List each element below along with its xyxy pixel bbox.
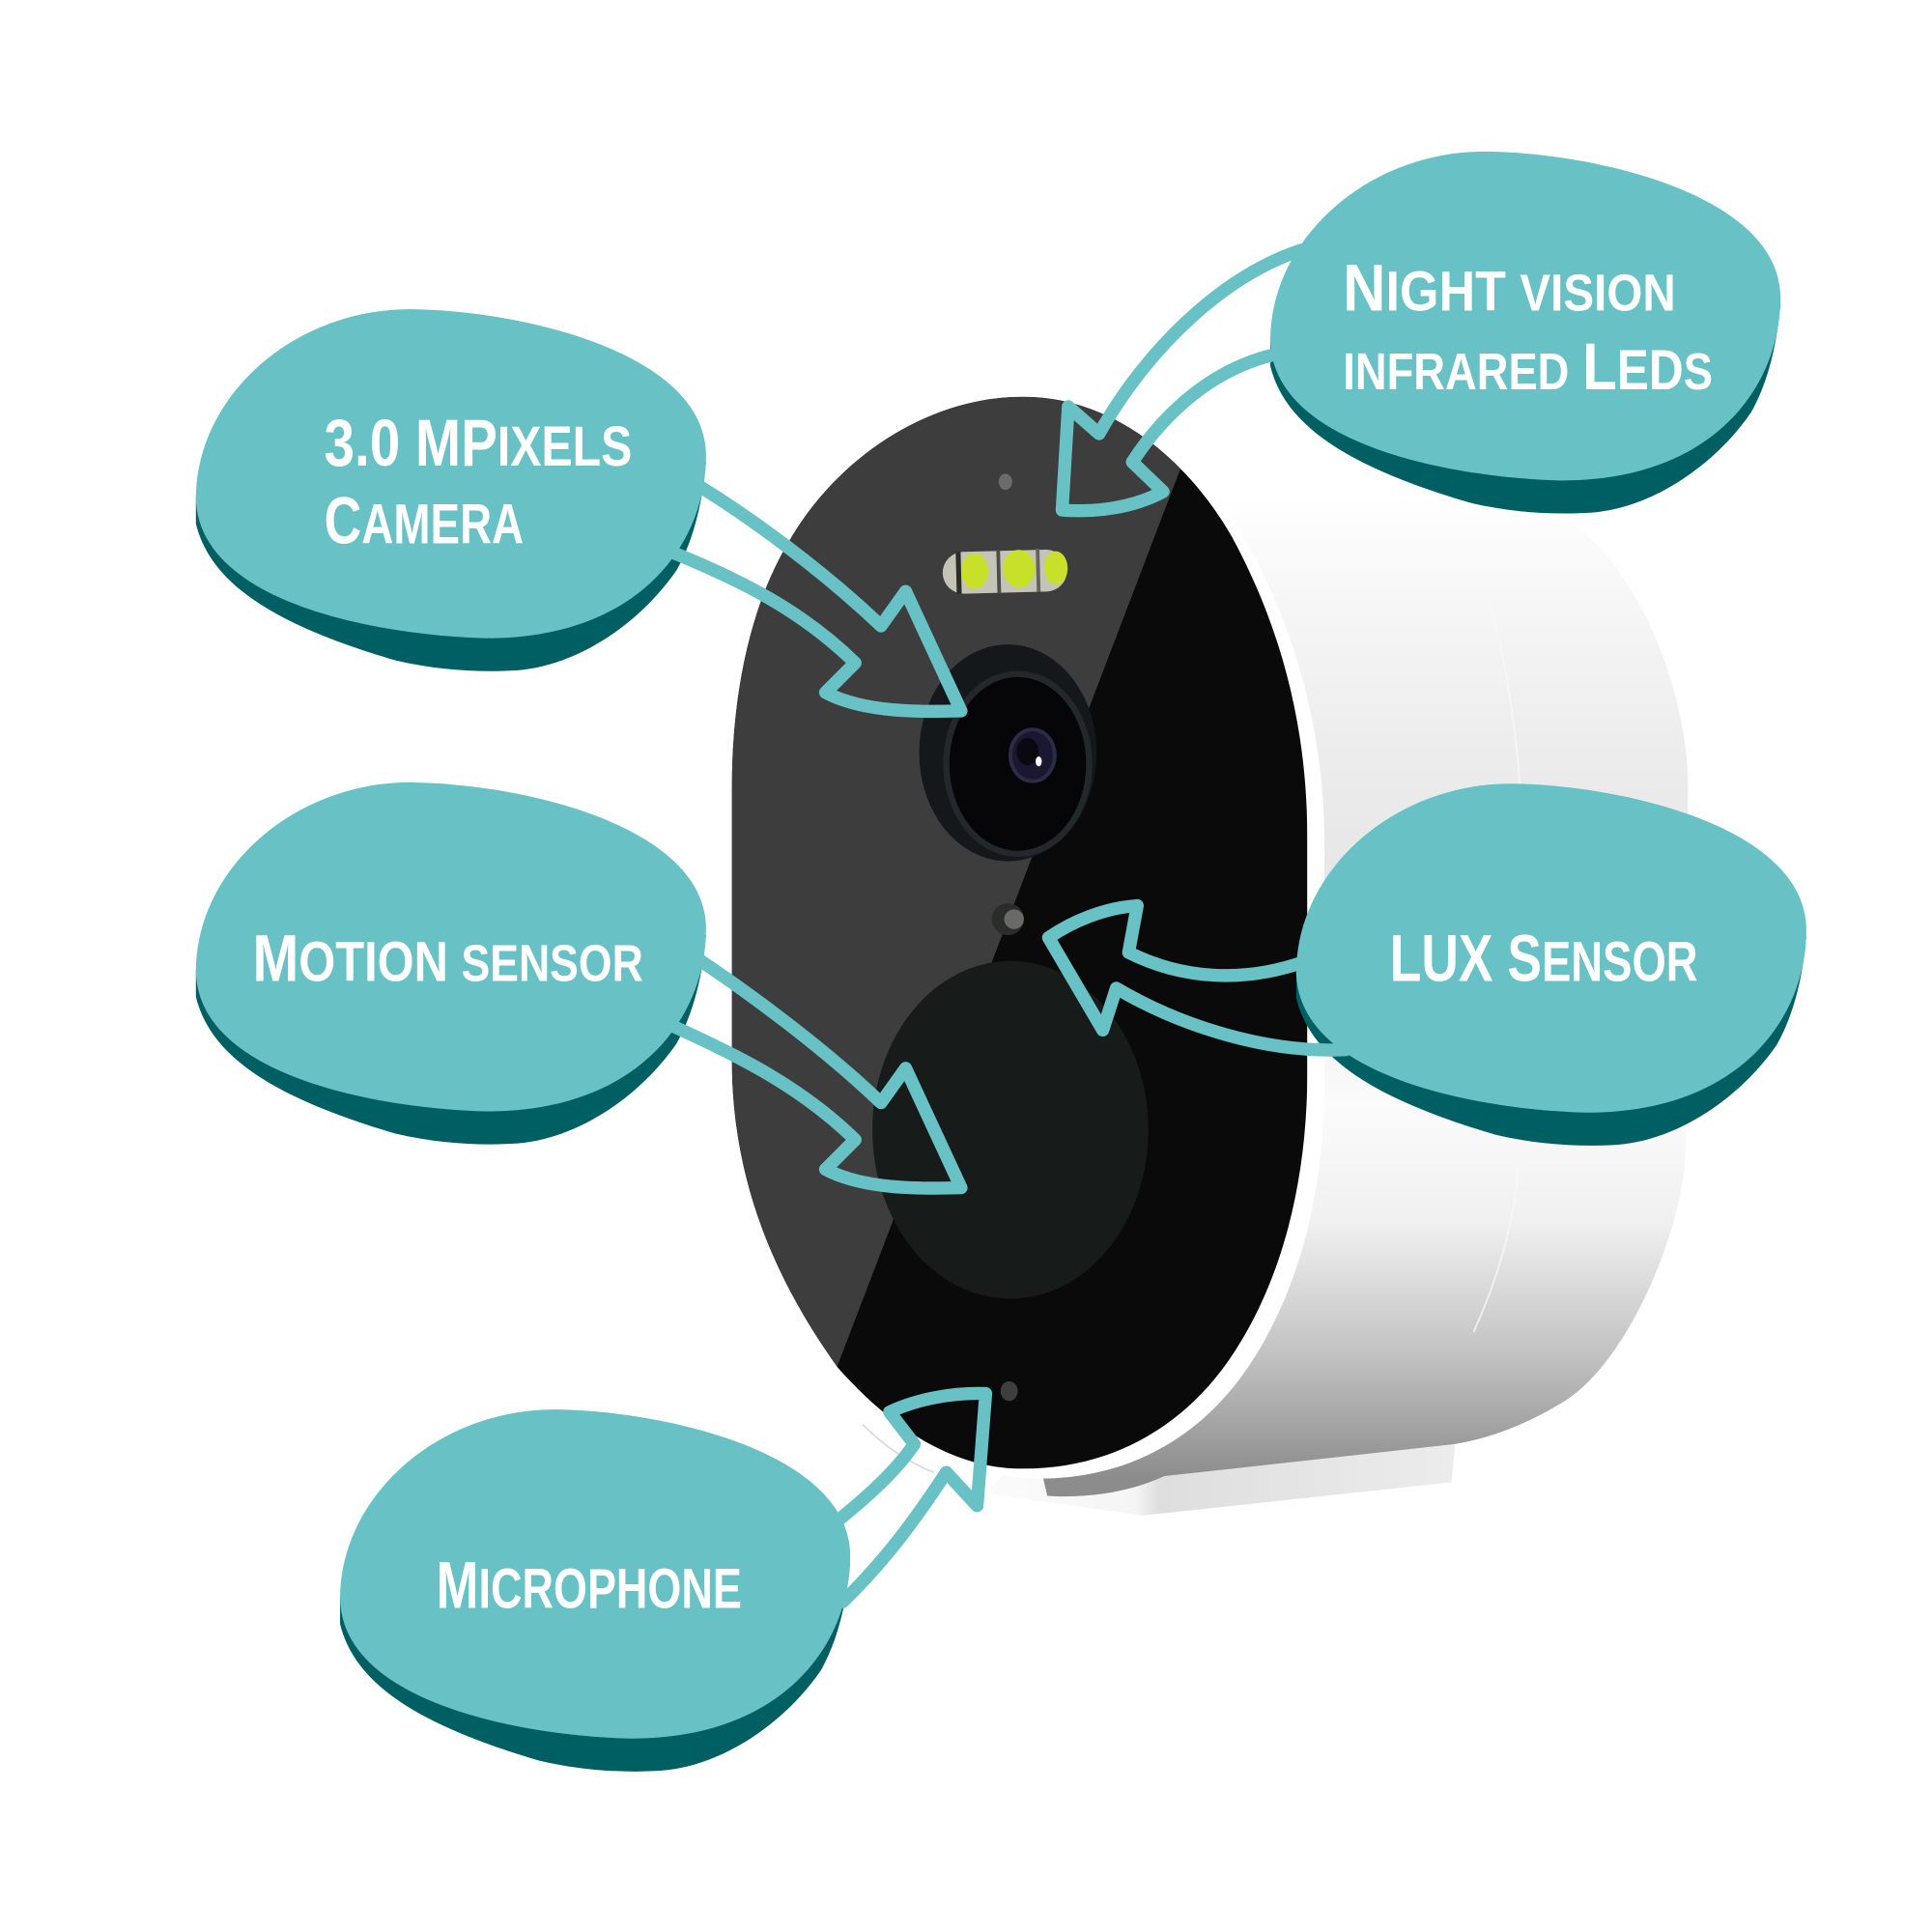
- callout: motion sensor: [196, 782, 961, 1188]
- mounting base: [985, 1444, 1455, 1516]
- camera illustration: [702, 382, 1688, 1516]
- bubble depth: [340, 1562, 850, 1772]
- bubble face: [1270, 152, 1780, 480]
- callout: 3.0 MPixels camera: [196, 309, 961, 711]
- label: MICROPHONE: [437, 1548, 742, 1623]
- arrow: [666, 480, 961, 711]
- label: LUX SENSOR: [1390, 921, 1698, 995]
- ring rim at lower left: [863, 1424, 934, 1472]
- bubble face: [1296, 783, 1806, 1113]
- arrow: [1062, 250, 1301, 511]
- label line 2: CAMERA: [324, 483, 524, 558]
- arrow: [666, 953, 961, 1188]
- bubble depth: [1270, 304, 1780, 514]
- callout: lux sensor: [1048, 783, 1806, 1146]
- callout: microphone: [340, 1393, 985, 1772]
- label: 3.0 MPIXELS: [324, 406, 632, 480]
- arrow: [1048, 906, 1346, 1050]
- bubble depth: [1296, 936, 1806, 1146]
- microphone hole: [1001, 1381, 1018, 1401]
- body seam: [1474, 596, 1520, 1332]
- arrow: [838, 1393, 985, 1602]
- black face: [732, 396, 1308, 1468]
- glass reflection: [732, 396, 1180, 1367]
- bubble face: [196, 782, 706, 1112]
- label: MOTION SENSOR: [252, 921, 643, 995]
- label line 2: INFRARED LEDS: [1343, 329, 1713, 404]
- lens: [920, 644, 1096, 862]
- bubble depth: [196, 462, 706, 671]
- bubble depth: [196, 935, 706, 1145]
- bubble face: [196, 309, 706, 639]
- camera body: [985, 443, 1688, 1496]
- label: NIGHT VISION: [1343, 250, 1676, 325]
- white front ring: [750, 407, 1324, 1479]
- callout: night vision infrared LEDs: [1062, 152, 1780, 514]
- LED strip: [942, 548, 1068, 594]
- motion sensor window: [872, 961, 1149, 1298]
- top indicator dot: [999, 473, 1012, 490]
- bubble face: [340, 1409, 850, 1739]
- lux sensor window: [992, 903, 1024, 935]
